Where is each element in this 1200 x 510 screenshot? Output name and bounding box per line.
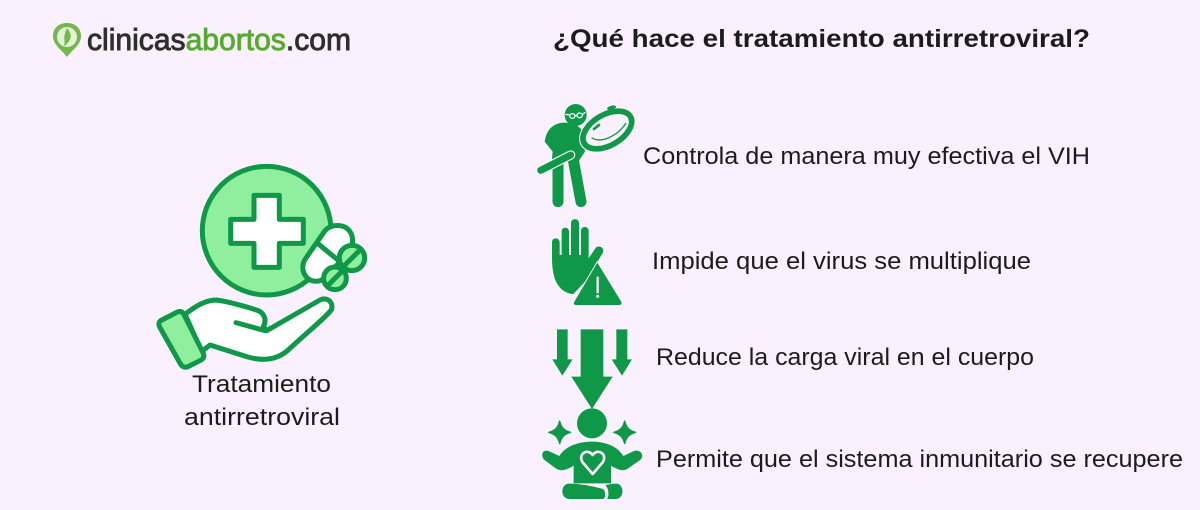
arm and handle <box>551 140 569 154</box>
label: Tratamiento antirretroviral: antirretroviral <box>184 404 340 431</box>
open hand <box>185 299 332 359</box>
warning triangle <box>574 263 622 305</box>
title: ¿Qué hace el tratamiento antirretroviral? <box>553 25 1090 53</box>
head <box>565 104 587 126</box>
crossed legs <box>562 484 605 499</box>
magnifying glass lens <box>571 98 644 162</box>
icon: hand holding medicine <box>159 166 365 367</box>
legs <box>558 160 581 202</box>
capsule pill <box>303 226 353 281</box>
white cross <box>231 195 303 267</box>
medical circle <box>202 166 331 295</box>
green cuff <box>159 311 204 367</box>
text: Controla de manera: Controla de manera muy efectiva el VIH <box>643 143 1090 170</box>
glasses <box>565 112 585 116</box>
icon: logo map pin <box>53 23 81 57</box>
logo: clinicasabortos.com <box>53 22 351 57</box>
text: Impide que el virus: Impide que el virus se multiplique <box>652 248 1031 275</box>
icon: stop hand with warning <box>552 219 622 305</box>
torso and arms <box>542 442 642 483</box>
icon: three down arrows <box>552 329 632 409</box>
icon: meditating person with heart <box>542 408 642 499</box>
head <box>577 408 607 438</box>
body <box>545 123 585 162</box>
label: Tratamiento antirretroviral: Tratamiento <box>192 371 331 398</box>
heart <box>581 452 604 474</box>
text: Permite que el sistema: Permite que el sistema inmunitario se recupere <box>656 446 1183 473</box>
logo wordmark: clinicasabortos.com <box>87 22 351 57</box>
sparkles <box>549 421 571 444</box>
icon: person with magnifying glass <box>541 98 644 202</box>
label: Tratamiento antirretroviral <box>184 371 340 431</box>
round tablets <box>324 245 365 290</box>
text: Reduce la carga viral: Reduce la carga viral en el cuerpo <box>656 344 1034 371</box>
hand <box>552 219 603 294</box>
